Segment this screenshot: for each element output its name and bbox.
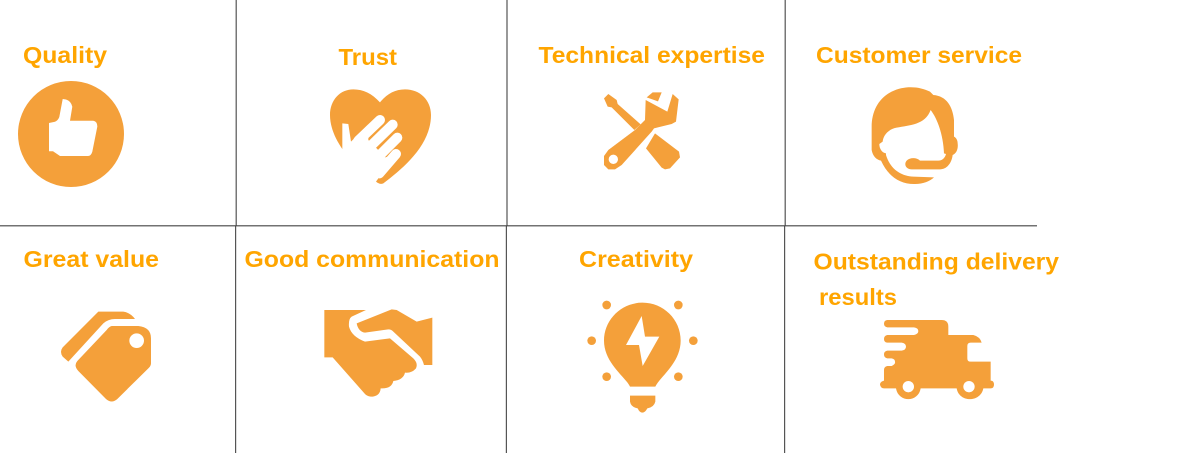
icon: handshake: [324, 309, 432, 397]
heading: Outstanding delivery results: [814, 248, 1059, 310]
icon: crossed wrench and screwdriver: [604, 92, 680, 169]
heading: Outstanding delivery results: results: [819, 284, 897, 310]
heading: Good communication: Good communication: [244, 246, 500, 272]
icon: fast delivery truck: [880, 320, 994, 399]
heading: Technical expertise: Technical expertise: [538, 42, 765, 68]
icon: light bulb with bolt: [587, 301, 698, 413]
icon: price tags: [61, 312, 151, 401]
heading: Great value: Great value: [24, 246, 159, 272]
heading: Quality: Quality: [23, 42, 107, 68]
icon: hand on heart: [320, 89, 431, 192]
icon: thumbs up in circle: [18, 81, 124, 187]
heading: Outstanding delivery results: Outstanding delivery: [814, 248, 1059, 274]
heading: Customer service: Customer service: [816, 42, 1022, 68]
heading: Creativity: Creativity: [579, 246, 693, 272]
heading: Trust: Trust: [338, 44, 397, 70]
icon: customer service headset agent: [872, 87, 958, 184]
